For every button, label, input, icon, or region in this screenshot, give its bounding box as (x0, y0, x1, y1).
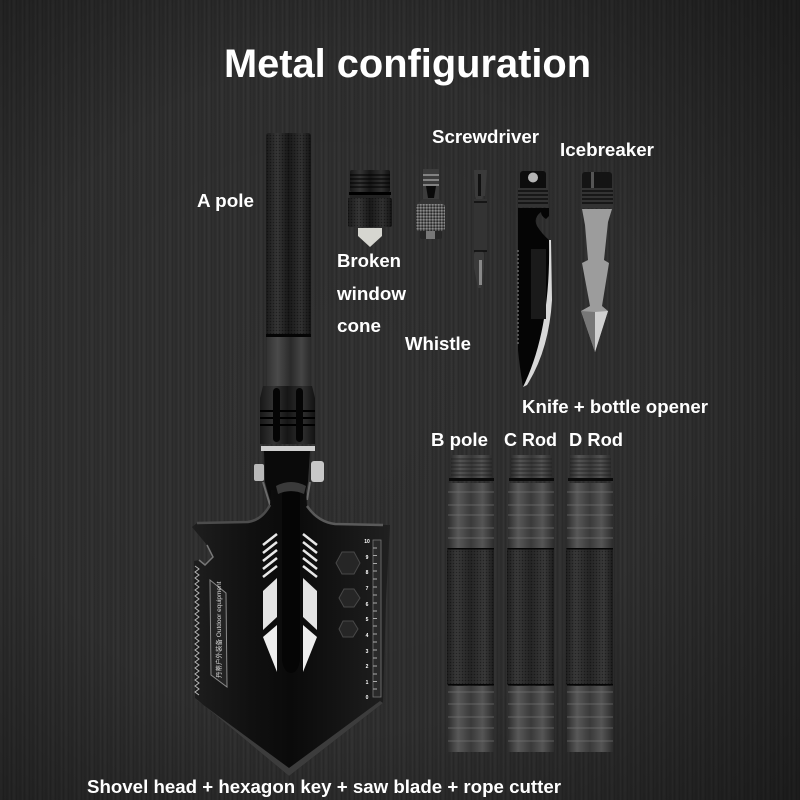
icon: A pole (266, 133, 311, 386)
ruler: 3 (366, 649, 369, 655)
ruler: 0 (366, 695, 369, 701)
icon: knife and bottle opener (518, 171, 552, 387)
icon: broken window cone (348, 170, 392, 247)
caption: shovel head features: Shovel head + hexagon key + saw blade + rope cutter (87, 777, 561, 797)
label plate: 丹蒂户外装备 Outdoor equipment (214, 581, 223, 678)
icon: shovel blade (192, 482, 390, 776)
ruler: 5 (366, 617, 369, 623)
icon: locking collar (260, 386, 315, 451)
label: icebreaker: Icebreaker (560, 140, 654, 160)
ruler (364, 539, 381, 701)
ruler: 4 (366, 633, 369, 639)
ruler: 8 (366, 570, 369, 576)
icon: screwdriver bit (474, 170, 487, 288)
icon: whistle (416, 169, 445, 239)
ruler: 6 (366, 602, 369, 608)
ruler: 9 (366, 555, 369, 561)
icon: C rod (507, 455, 554, 752)
ruler: 7 (366, 586, 369, 592)
saw teeth (195, 566, 199, 695)
centre shaft (282, 492, 300, 673)
bottle opener notch (199, 545, 213, 565)
label: A pole: A pole (197, 191, 254, 211)
ruler: 1 (366, 680, 369, 686)
icon: folding shovel with A pole (192, 133, 390, 776)
icon: B pole rod (447, 455, 494, 752)
label: broken window cone: window (336, 284, 407, 304)
label: screwdriver: Screwdriver (432, 127, 539, 147)
icon: icebreaker (581, 172, 613, 352)
white stripes (263, 534, 317, 577)
label: broken window cone: Broken (337, 251, 401, 271)
label: knife and bottle opener: Knife + bottle opener (522, 397, 708, 417)
title: Metal configuration (224, 42, 591, 86)
label: B pole: B pole (431, 430, 488, 450)
label plate (210, 580, 227, 687)
label: C Rod: C Rod (504, 430, 557, 450)
label: whistle: Whistle (405, 334, 471, 354)
icon: hinge and bolts (254, 451, 324, 505)
icon: D rod (566, 455, 613, 752)
ruler: 10 (364, 539, 370, 545)
label: broken window cone (336, 251, 407, 336)
label: broken window cone: cone (337, 316, 381, 336)
label: D Rod: D Rod (569, 430, 623, 450)
ruler: 2 (366, 664, 369, 670)
hexagon key holes (336, 552, 360, 574)
